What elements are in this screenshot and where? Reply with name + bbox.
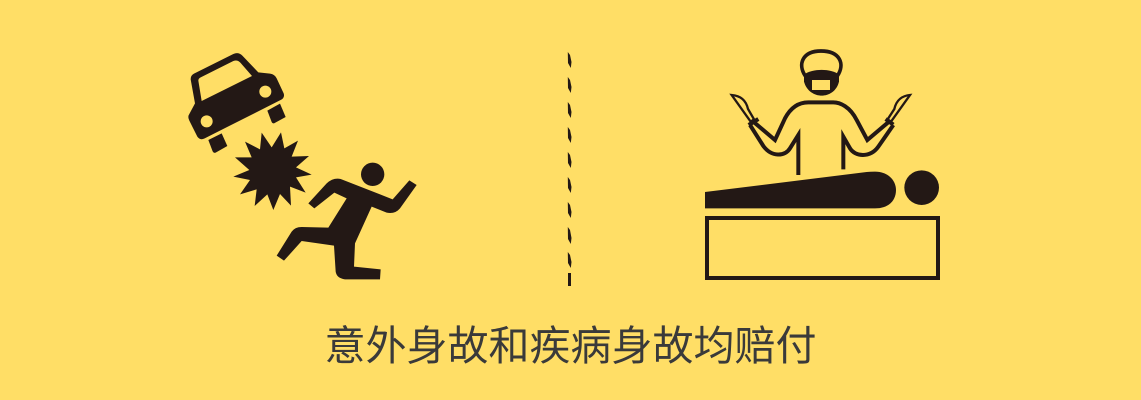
- icon: car accident with running pedestrian: [188, 53, 417, 279]
- icon: right scalpel: [888, 95, 910, 122]
- icon: car: [188, 53, 286, 153]
- icon: operating table: [707, 218, 938, 278]
- icon: running person: [277, 163, 417, 279]
- caption text: 意外身故和疾病身故均赔付: [324, 323, 816, 369]
- icon: surgeon and patient on operating table: [705, 51, 939, 278]
- divider: dashed line: [568, 52, 572, 286]
- icon: left scalpel: [732, 95, 754, 122]
- icon: surgeon head with cap and mask: [802, 51, 841, 96]
- icon: patient: [705, 170, 939, 208]
- icon: impact burst: [233, 132, 312, 210]
- icon: surgeon body: [749, 102, 893, 175]
